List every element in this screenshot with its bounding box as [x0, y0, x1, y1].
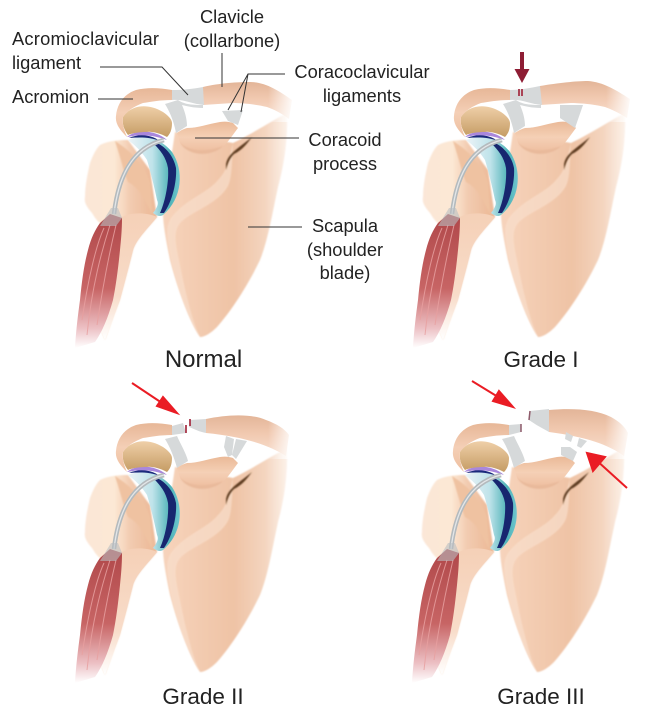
heading: Grade II: Grade II [162, 684, 244, 709]
tear mark [519, 89, 522, 96]
label: Coracoid process: Coracoid [308, 129, 382, 150]
heading: Normal: Normal [165, 346, 242, 373]
label: Scapula: blade) [320, 262, 370, 283]
clavicle displaced [549, 409, 628, 456]
label: Coracoclavicular ligaments: ligaments [323, 85, 401, 106]
heading: Grade I: Grade I [503, 347, 579, 372]
panel: Grade III [412, 381, 631, 709]
panel: Grade II [75, 383, 294, 709]
arrow: Grade II [132, 383, 177, 413]
label: Acromion: Acromion [12, 86, 89, 107]
label: Clavicle: Clavicle [200, 6, 264, 27]
label: Coracoclavicular ligaments: Coracoclavicular [294, 61, 430, 82]
label: Clavicle: (collarbone) [184, 30, 280, 51]
coracoclavicular ligaments [222, 110, 243, 125]
clavicle ligament stump [189, 419, 206, 433]
arrow head: Grade I [514, 69, 530, 83]
label: Scapula: Scapula [312, 215, 378, 236]
arrow: Grade III top [472, 381, 513, 407]
label: Acromioclavicular: Acromioclavicular [12, 28, 159, 49]
clavicle [206, 415, 289, 456]
clavicle [540, 81, 630, 118]
panel: Grade I [413, 52, 632, 372]
acromion ligament stump [172, 423, 186, 435]
label: Scapula: (shoulder [307, 239, 383, 260]
panel: Normal shoulder [12, 6, 430, 373]
torn conoid stumps [565, 432, 587, 448]
arrow: Grade I [520, 52, 524, 69]
acromioclavicular ligament [172, 87, 204, 105]
leader lines [98, 53, 302, 227]
clavicle [203, 82, 292, 119]
heading: Grade III: Grade III [497, 684, 585, 709]
acromion stump [509, 424, 521, 435]
label: Coracoid process: process [313, 153, 377, 174]
tear marks [186, 419, 190, 433]
coracoclavicular ligaments [560, 105, 583, 128]
acromioclavicular ligament [510, 86, 542, 105]
label: ligament: ligament [12, 52, 81, 73]
arrow: Grade III bottom [587, 453, 627, 488]
clavicle ligament stump [529, 409, 549, 432]
coracoclavicular ligaments [224, 436, 247, 459]
coracoid stump [561, 447, 577, 461]
